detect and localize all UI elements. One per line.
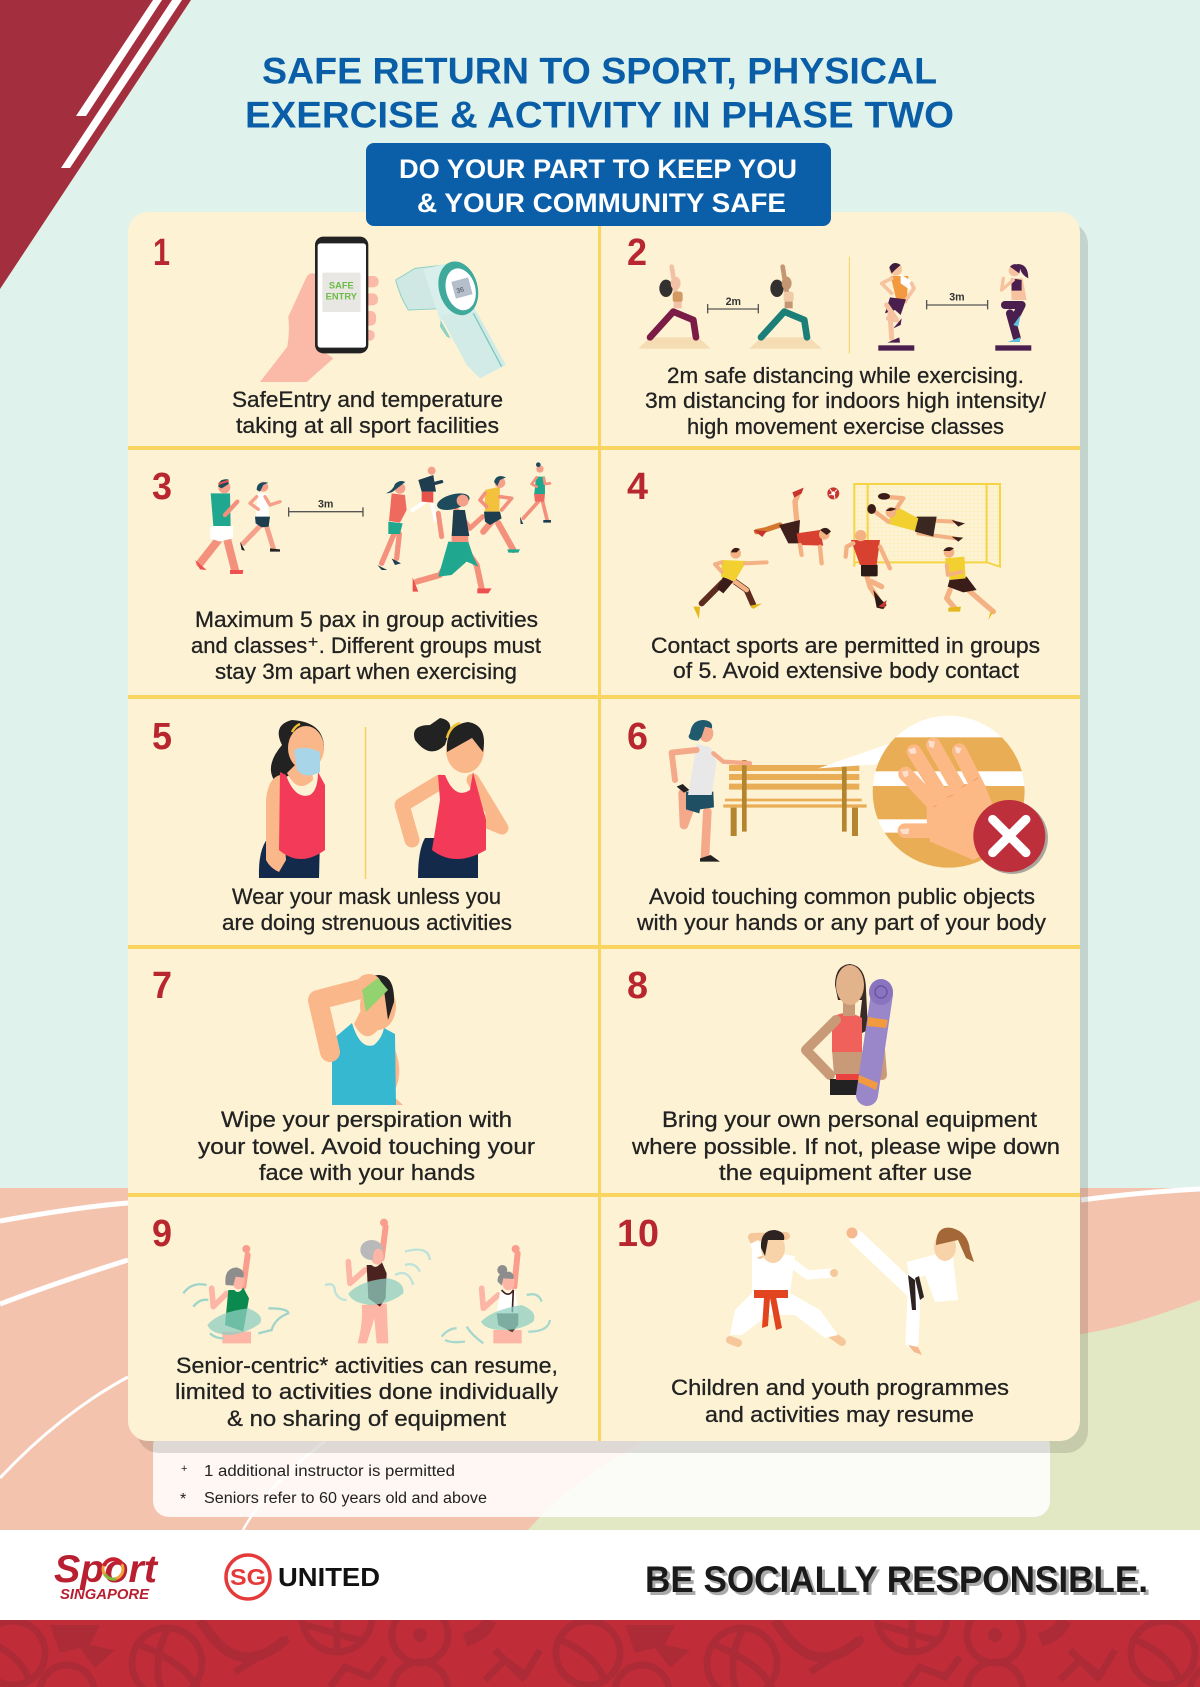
text: panel 2: high movement exercise classes	[687, 414, 1004, 439]
panel 5: masks: 5	[152, 716, 172, 758]
text: panel 1: taking at all sport facilities	[236, 413, 499, 438]
corner banner: red triangle with stripes	[0, 0, 191, 289]
logo: SG United: UNITED	[278, 1562, 380, 1592]
text: panel 2: 2m safe distancing while exercising.	[667, 363, 1024, 388]
text: panel 3: Maximum 5 pax in group activities	[195, 607, 538, 632]
panel 7: perspiration	[152, 965, 536, 1185]
background: running track	[0, 1188, 1200, 1530]
panel 1: SafeEntry and temperature	[153, 232, 506, 438]
title: SAFE RETURN TO SPORT, PHYSICAL	[262, 50, 937, 92]
measure: 3m: 3m	[318, 499, 333, 511]
panel 9: senior-centric: 9	[152, 1213, 172, 1255]
panel 7: perspiration: 7	[152, 965, 172, 1007]
panel 3: group activities	[152, 462, 551, 684]
footnote panel: 1 additional instructor is permitted	[204, 1463, 455, 1480]
text: panel 7	[198, 1107, 536, 1185]
icon: hand holding phone: ENTRY	[326, 292, 358, 302]
panel 4: contact sports	[627, 466, 1040, 683]
illustration: karate girl	[846, 1228, 974, 1355]
subtitle box: DO YOUR PART TO KEEP YOU	[399, 154, 797, 184]
illustration: seniors in water	[183, 1219, 550, 1343]
text: panel 6: Avoid touching common public objects	[649, 884, 1035, 909]
panel 10: children and youth	[617, 1213, 1009, 1427]
logo: Sport Singapore: Sport	[54, 1548, 159, 1591]
text: panel 5	[222, 884, 512, 935]
footnote panel: Seniors refer to 60 years old and above	[204, 1490, 487, 1507]
text: panel 9	[175, 1353, 559, 1431]
panel 5: masks	[152, 716, 512, 935]
footnote panel	[153, 1430, 1050, 1517]
text: panel 10	[671, 1375, 1009, 1427]
text: panel 8: where possible. If not, please wipe down	[631, 1134, 1060, 1159]
text: panel 3: and classes⁺. Different groups must	[191, 633, 542, 658]
illustration: karate boy	[730, 1230, 842, 1343]
illustration: football game	[693, 484, 1000, 620]
text: panel 6: with your hands or any part of your body	[636, 910, 1047, 935]
illustration: woman with yoga mat	[806, 964, 893, 1095]
text: panel 9: & no sharing of equipment	[227, 1406, 507, 1431]
panel 10: children and youth: 10	[617, 1213, 659, 1255]
illustration: man wiping face	[318, 974, 403, 1105]
text: panel 1	[232, 387, 503, 438]
panel 1: SafeEntry and temperature: 1	[153, 232, 170, 274]
text: panel 5: are doing strenuous activities	[222, 910, 512, 935]
text: panel 7: your towel. Avoid touching your	[198, 1134, 536, 1159]
panel 8: personal equipment	[627, 964, 1060, 1185]
callout: hand close-up with striped lens	[818, 716, 1027, 869]
text: panel 7: face with your hands	[259, 1160, 475, 1185]
icon: red cross	[973, 800, 1048, 874]
red band with sport pattern	[0, 1620, 1200, 1687]
text: panel 2	[645, 363, 1047, 439]
measure: 2m: 2m	[726, 296, 741, 308]
illustration: woman stretching	[672, 720, 750, 862]
icon: infrared thermometer	[396, 257, 506, 378]
illustration: bench	[723, 760, 867, 836]
text: panel 3: stay 3m apart when exercising	[215, 659, 517, 684]
panel 2: distancing while exercising: 2	[627, 232, 647, 274]
slogan: BE SOCIALLY RESPONSIBLE.	[645, 1559, 1148, 1600]
panel 6: avoid touching: 6	[627, 716, 648, 758]
text: panel 2: 3m distancing for indoors high intensity/	[645, 388, 1047, 413]
panel 4: contact sports: 4	[627, 466, 648, 508]
icon: infrared thermometer: 36	[456, 286, 465, 295]
title	[245, 50, 954, 136]
text: panel 10: and activities may resume	[705, 1402, 974, 1427]
text: panel 9: Senior-centric* activities can resume,	[176, 1353, 558, 1378]
panel 6: avoid touching	[627, 716, 1048, 935]
panel shadow	[137, 222, 1088, 1453]
panel 3: group activities: 3	[152, 466, 172, 508]
text: panel 1: SafeEntry and temperature	[232, 387, 503, 412]
icon: hand holding phone	[260, 237, 379, 382]
illustration: woman wearing mask	[259, 720, 325, 878]
panel 8: personal equipment: 8	[627, 965, 648, 1007]
text: panel 8: the equipment after use	[719, 1160, 972, 1185]
panel 2: distancing while exercising	[627, 232, 1047, 439]
logo: SG United: SG	[230, 1564, 266, 1590]
main panel	[128, 212, 1080, 1441]
text: panel 5: Wear your mask unless you	[232, 884, 501, 909]
text: panel 9: limited to activities done individually	[175, 1379, 559, 1404]
illustration: woman without mask, jogging	[402, 718, 502, 878]
footer band	[0, 1530, 1200, 1620]
subtitle box: & YOUR COMMUNITY SAFE	[417, 188, 786, 218]
text: panel 4: of 5. Avoid extensive body contact	[673, 658, 1020, 683]
measure: 2m	[708, 296, 758, 313]
footnote panel: +	[181, 1463, 187, 1475]
measure: 3m	[927, 292, 988, 309]
illustration: yoga at 2m and step class at 3m	[638, 257, 1031, 353]
measure: 3m: 3m	[949, 292, 965, 304]
illustration: groups of runners	[195, 462, 551, 593]
text: panel 10: Children and youth programmes	[671, 1375, 1009, 1400]
text: panel 3	[191, 607, 542, 684]
text: panel 6	[636, 884, 1047, 935]
subtitle box	[366, 143, 831, 226]
icon: hand holding phone: SAFE	[329, 281, 354, 291]
logo: SG United	[226, 1555, 380, 1599]
footnote panel: *	[180, 1491, 186, 1508]
text: panel 8: Bring your own personal equipment	[662, 1107, 1038, 1132]
title: EXERCISE & ACTIVITY IN PHASE TWO	[245, 94, 954, 136]
text: panel 7: Wipe your perspiration with	[221, 1107, 512, 1132]
measure: 3m	[289, 499, 363, 517]
ball	[827, 487, 839, 499]
text: panel 4	[651, 633, 1040, 683]
text: panel 4: Contact sports are permitted in groups	[651, 633, 1040, 658]
panel 9: senior-centric	[152, 1213, 559, 1431]
logo: Sport Singapore: SINGAPORE	[60, 1587, 150, 1603]
text: panel 8	[631, 1107, 1060, 1185]
